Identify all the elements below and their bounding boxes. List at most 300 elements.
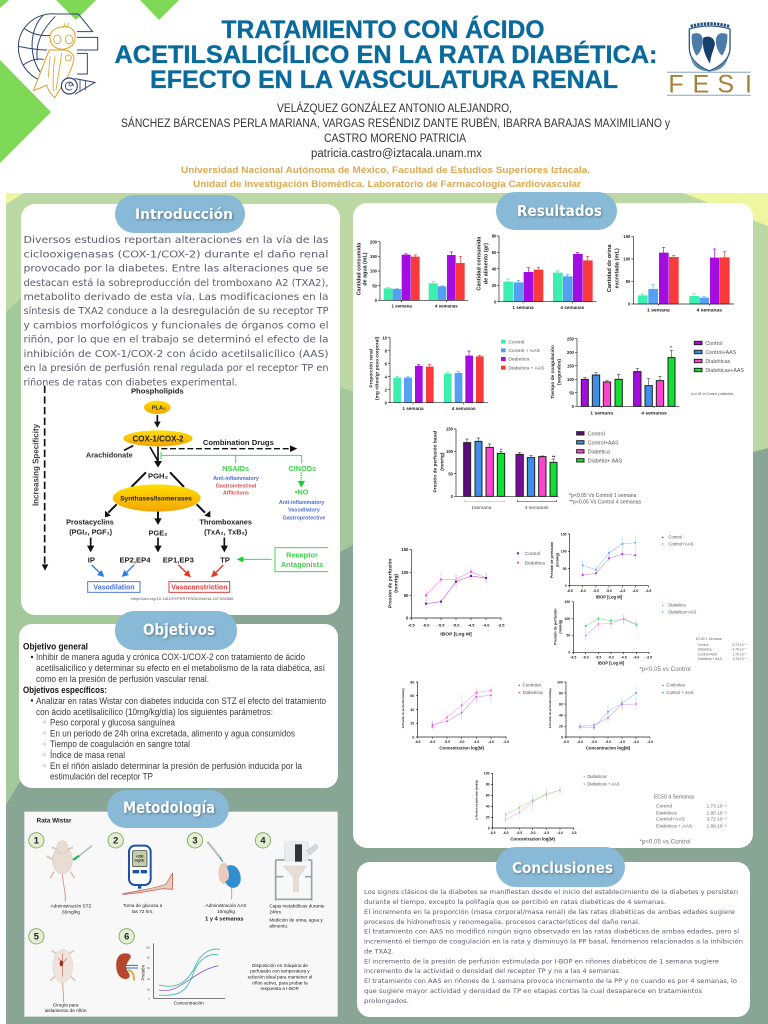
chart: COX pathway diagram: CINODs: [288, 464, 316, 473]
line chart: controles vs control+AAS: 40: [559, 714, 563, 718]
bar chart: proporción renal: 10: [382, 335, 388, 340]
table: EC50 1 semana: 5.70·10⁻⁶: [732, 643, 747, 647]
bar chart: agua: 4 semanas: [435, 303, 458, 308]
text block: objetivos: Peso corporal y glucosa sanguínea: [50, 718, 175, 728]
authors: patricia.castro@iztacala.unam.mx: [311, 148, 482, 160]
line chart: diabética vs diabética+AAS IBOP: -4.5: [621, 656, 627, 660]
line chart: control vs diabética IBOP: -5.5: [438, 622, 445, 627]
panel: Introducción: [21, 195, 340, 615]
step 1: STZ: Administración STZ: [51, 904, 91, 909]
bar chart: agua: 50: [372, 283, 378, 288]
text block: objetivos: como en la presión de perfusión vascular renal.: [36, 674, 209, 684]
bar chart: orina: 50: [626, 279, 631, 284]
line chart: controles vs diabéticas: -6.0: [429, 740, 435, 744]
line chart: controles vs diabéticas: Diabeticas: [523, 690, 543, 695]
step 6: perfusion: riñón activo, para probar la: [252, 980, 308, 985]
line chart: control vs diabética IBOP: -4.5: [468, 622, 475, 627]
bar chart: coagulación: 250: [567, 336, 575, 341]
bar chart: presión basal: Presión de perfusión basal: [433, 431, 439, 493]
line chart: controles vs diabéticas: [401, 680, 543, 750]
bar chart: coagulación: 0: [572, 404, 575, 409]
step 2: glucose: las 72 hrs.: [132, 909, 153, 914]
line chart: control vs diabética IBOP: Control: [525, 551, 540, 557]
text block: objetivos: con ácido acetilsalicílico (10mg/kg/día) los siguientes parámetros:: [36, 707, 273, 717]
chart: COX pathway diagram: Gastrointestinal: [216, 483, 257, 489]
note: significance 4 semanas: *p<0.05 vs Control: [639, 839, 691, 845]
bar chart: alimento: 20: [492, 283, 497, 288]
bar chart: proporción renal: 1 semana: [402, 406, 424, 411]
step 6: perfusion: solución ideal para mantener el: [248, 975, 312, 980]
bar chart: agua: 0: [375, 298, 378, 303]
bar chart: presión basal: [433, 427, 558, 511]
line chart: control vs diabética IBOP: 100: [401, 570, 409, 575]
panel: Metodología: Rata Wistar: [37, 818, 72, 825]
step 2: glucose: <200: [136, 854, 144, 858]
title: [114, 15, 658, 94]
chart: COX pathway diagram: Antagonists: [281, 560, 323, 569]
chart: COX pathway diagram: Vasodilatory: [288, 507, 320, 513]
legend: coagulación: Diabéticas: [705, 359, 731, 365]
line chart: diabética vs diabética+AAS IBOP: (mmHg): [559, 619, 563, 634]
text block: objetivos: Tiempo de coagulación en sangre total: [50, 739, 190, 749]
line chart: control vs control+AAS IBOP: (mmHg): [555, 552, 559, 567]
legend: presión basal: Control: [588, 431, 605, 437]
table: EC50 4 semanas: Control+AAS: [656, 817, 686, 823]
bar chart: alimento: [477, 234, 597, 310]
heading: Objetivos: [115, 611, 237, 650]
table: EC50 1 semana: Control: [698, 643, 709, 647]
text block: objetivos: En un periodo de 24h orina excretada, alimento y agua consumidos: [50, 728, 296, 738]
line chart: controles vs control+AAS: -6.5: [563, 740, 569, 744]
bar chart: proporción renal: 2: [385, 387, 388, 392]
bar chart: presión basal: **: [552, 454, 556, 459]
bar chart: orina: 4 semanas: [697, 308, 722, 314]
step 3: AAS: Administración AAS: [206, 903, 246, 908]
step 6: perfusion: perfusado con temperatura y: [250, 969, 310, 974]
step 5: surgery: [29, 929, 87, 1013]
text block: conclusiones: durante el tiempo, excepto la polifagia que se percibió en ratas diabéticas de 4 semanas.: [364, 898, 666, 906]
bar chart: coagulación: [550, 336, 679, 417]
heading: Introducción: [115, 195, 245, 233]
bar chart: presión basal: *: [500, 447, 502, 452]
line chart: controles vs control+AAS: Controles: [666, 683, 685, 688]
line chart: diabéticas vs diabéticas+AAS: 40: [486, 805, 490, 809]
step 4: cage: 4: [260, 836, 266, 846]
line chart: diabética vs diabética+AAS IBOP: Diabética: [668, 603, 686, 608]
text block: introducción: y cambios morfológicos y funcionales de órganos como el: [24, 320, 328, 332]
legend: coagulación: Control: [705, 341, 723, 347]
line chart: controles vs diabéticas: 0: [412, 735, 414, 739]
chart: COX pathway diagram: Vasodilation: [93, 584, 135, 591]
line chart: control vs diabética IBOP: [387, 547, 545, 637]
chart: COX pathway diagram: [31, 386, 328, 601]
bar chart: orina: 150: [623, 234, 631, 239]
panel: Objetivos: [19, 611, 338, 788]
line chart: diabéticas vs diabéticas+AAS: 100: [484, 772, 490, 776]
table: EC50 1 semana: 1.76·10⁻⁵: [732, 657, 747, 661]
line chart: diabética vs diabética+AAS IBOP: Presión de perfusión: [553, 608, 557, 645]
table: EC50 1 semana: EC50 1 Semana: [696, 637, 722, 641]
affiliations: Universidad Nacional Autónoma de México, Facultad de Estudios Superiores Iztacala.: [181, 165, 590, 176]
bar chart: agua: Cantidad consumida: [356, 243, 362, 295]
step 4: cage: Cajas metabólicas durante: [269, 903, 325, 908]
bar chart: coagulación: 150: [567, 363, 575, 368]
chart: COX pathway diagram: NSAIDs: [222, 464, 249, 473]
line chart: controles vs control+AAS: -4.5: [619, 740, 625, 744]
title: ACETILSALICÍLICO EN LA RATA DIABÉTICA:: [114, 40, 658, 69]
step 6: perfusion: Concentración: [174, 1000, 204, 1005]
line chart: control vs diabética IBOP: IBOP [Log M]: [440, 631, 472, 637]
line chart: control vs control+AAS IBOP: -6.0: [580, 589, 586, 593]
chart: COX pathway diagram: Anti-inflammatory: [279, 500, 324, 506]
panel: Metodología: [24, 790, 338, 1017]
text block: objetivos: [23, 642, 326, 782]
text block: objetivos: Objetivo general: [23, 642, 88, 652]
legend: coagulación: *p<0.05 Vs Control y diabetica: [690, 392, 733, 396]
text block: objetivos: acetilsalicílico y determinar su efecto en el metabolismo de la rata diabética, así: [36, 663, 326, 673]
text block: objetivos: En el riñón aislado determinar la presión de perfusión inducida por la: [50, 761, 302, 771]
bar chart: orina: excretada (mL): [615, 248, 621, 288]
line chart: controles vs control+AAS: -5.5: [591, 740, 597, 744]
step 6: perfusion: 40: [147, 977, 151, 981]
chart: COX pathway diagram: Afflictions: [223, 491, 249, 497]
chart: COX pathway diagram: (TxA₂, TxB₂): [204, 527, 248, 536]
table: EC50 4 semanas: 1.86·10⁻⁵: [707, 823, 727, 828]
bar charts: [356, 234, 744, 511]
chart: COX pathway diagram: Combination Drugs: [203, 438, 274, 447]
text block: introducción: síntesis de TXA2 conduce a la desregulación de su receptor TP: [24, 306, 329, 317]
line chart: controles vs diabéticas: 40: [410, 708, 414, 712]
step 5: surgery: Cirugía para: [53, 1002, 79, 1007]
line chart: diabéticas vs diabéticas+AAS: -5.5: [516, 831, 522, 835]
line chart: diabética vs diabética+AAS IBOP: 0: [568, 651, 570, 655]
legend: proporción renal: Control + AAS: [508, 348, 540, 354]
legend: proporción renal: Diabetica: [508, 357, 529, 363]
authors: SÁNCHEZ BÁRCENAS PERLA MARIANA, VARGAS RESÉNDIZ DANTE RUBÉN, IBARRA BARAJAS MAXIMILIANO y: [121, 117, 670, 130]
line chart: diabética vs diabética+AAS IBOP: 150: [564, 600, 570, 604]
line chart: control vs control+AAS IBOP: -5.5: [593, 589, 599, 593]
line chart: controles vs diabéticas: Concentracion log(M): [439, 745, 484, 750]
text block: introducción: Diversos estudios reportan alteraciones en la vía de las: [24, 235, 329, 246]
legend: presión basal: [569, 431, 642, 506]
bar chart: proporción renal: Proporción renal: [368, 349, 374, 388]
chart: COX pathway diagram: EP1,EP3: [163, 556, 194, 565]
step 6: perfusion: respuesta a I-BOP.: [260, 986, 299, 991]
line chart: controles vs control+AAS: -6.0: [577, 740, 583, 744]
legend: proporción renal: [501, 339, 545, 371]
heading: Metodología: Metodología: [123, 798, 215, 817]
line chart: control vs control+AAS IBOP: 50: [563, 567, 567, 571]
heading: Conclusiones: [496, 847, 625, 887]
bar chart: agua: de agua (mL): [363, 252, 369, 286]
line chart: diabéticas vs diabéticas+AAS: 0: [488, 826, 490, 830]
line chart: control vs control+AAS IBOP: -4.5: [619, 589, 625, 593]
bar chart: coagulación: 4 semanas: [641, 411, 667, 417]
bar chart: orina: 1 semana: [647, 308, 670, 314]
step 4: cage: 24hrs: [269, 909, 282, 914]
line chart: controles vs diabéticas: -4.0: [488, 740, 494, 744]
line chart: controles vs diabéticas: 60: [410, 694, 414, 698]
step 2: glucose: 2: [113, 836, 118, 846]
legend: presión basal: Control+AAS: [588, 440, 619, 446]
text block: objetivos: Inhibir de manera aguda y crónica COX-1/COX-2 con tratamiento de ácido: [36, 652, 305, 662]
title: EFECTO EN LA VASCULATURA RENAL: [150, 66, 618, 94]
line chart: diabéticas vs diabéticas+AAS: -4.0: [557, 831, 563, 835]
bar chart: agua: 200: [370, 239, 378, 244]
text block: conclusiones: procesos de hidronefrosis y renomegalia, procesos característicos del daño renal.: [364, 918, 640, 926]
table: EC50 4 semanas: EC50 4 Semanas: [654, 795, 695, 801]
heading: Resultados: [496, 192, 617, 230]
line chart: diabética vs diabética+AAS IBOP: -6.0: [583, 656, 589, 660]
step 2: glucose: [108, 833, 173, 914]
text block: conclusiones: incremento de la actividad o densidad del receptor TP y no a las 4 semanas.: [364, 968, 621, 975]
chart: COX pathway diagram: EP2,EP4: [119, 556, 151, 565]
bar chart: presión basal: 1semana: [471, 505, 492, 511]
line chart: controles vs diabéticas: -4.5: [473, 740, 479, 744]
bar chart: alimento: 60: [492, 250, 497, 255]
line chart: control vs diabética IBOP: 50: [404, 593, 409, 598]
step 4: cage: Medición de orina, agua y: [269, 918, 323, 923]
step 1: STZ: 1: [34, 836, 39, 846]
text block: introducción: [24, 235, 329, 388]
bar chart: orina: 100: [623, 257, 631, 262]
table: EC50 1 semana: Diabetica: [698, 648, 712, 652]
line chart: diabética vs diabética+AAS IBOP: IBOP [Log M]: [598, 661, 625, 666]
line chart: control vs control+AAS IBOP: -3.5: [645, 589, 651, 593]
chart: COX pathway diagram: COX-1/COX-2: [132, 434, 184, 443]
line chart: control vs diabética IBOP: -6.5: [408, 622, 416, 627]
heading: Introducción: Introducción: [135, 207, 233, 223]
line chart: controles vs control+AAS: 100: [557, 680, 563, 684]
icon: UNAM shield: [689, 24, 730, 71]
table: EC50 1 semana: 1.76·10⁻⁵: [732, 652, 747, 656]
step 6: perfusion: 80: [147, 955, 151, 959]
line chart: control vs control+AAS IBOP: 100: [561, 550, 567, 554]
chart: COX pathway diagram: (PGI₂, PGF₁): [69, 527, 113, 536]
line chart: controles vs control+AAS: -5.0: [605, 740, 611, 744]
chart: COX pathway diagram: Synthases/Isomerases: [120, 495, 192, 502]
text block: conclusiones: [364, 888, 743, 1005]
line chart: diabética vs diabética+AAS IBOP: 50: [566, 634, 570, 638]
line chart: control vs control+AAS IBOP: Presión de perfusión: [550, 542, 554, 578]
bar chart: coagulación: 50: [569, 390, 575, 395]
step 3: AAS: 1 y 4 semanas: [205, 916, 244, 922]
line chart: controles vs control+AAS: -3.5: [647, 740, 653, 744]
text block: introducción: riñón, por lo que en el trabajo se determinó el efecto de la: [24, 335, 328, 346]
line chart: diabéticas vs diabéticas+AAS: [474, 772, 620, 841]
bar chart: agua: 150: [370, 254, 378, 259]
bar chart: presión basal: 0: [451, 494, 454, 499]
line chart: diabética vs diabética+AAS IBOP: -6.5: [570, 656, 576, 660]
line chart: diabética vs diabética+AAS IBOP: -3.5: [646, 656, 652, 660]
step 1: STZ: 65mg/kg: [62, 910, 80, 915]
note: significance: *p<0.05 vs Control: [639, 667, 691, 673]
line chart: control vs diabética IBOP: -5.0: [453, 622, 460, 627]
text block: conclusiones: El incremento de la presión de perfusión estimulada por I-BOP en riñones diabéticos de 1 semana sugiere: [364, 957, 719, 965]
text block: introducción: ciclooxigenasas (COX-1/COX-2) durante el daño renal: [24, 249, 328, 260]
line chart: control vs diabética IBOP: -4.0: [483, 622, 490, 627]
step 3: AAS: [187, 833, 246, 922]
line chart: controles vs diabéticas: -5.5: [444, 740, 450, 744]
line chart: control vs control+AAS IBOP: -4.0: [632, 589, 638, 593]
bar chart: alimento: 40: [492, 266, 497, 271]
bar chart: presión basal: (mmHg): [439, 452, 445, 471]
step 6: perfusion: [116, 929, 312, 1005]
chart: COX pathway diagram: Vasoconstriction: [171, 584, 227, 591]
text block: objetivos: Objetivos específicos:: [23, 685, 107, 695]
line chart: controles vs control+AAS: 80: [559, 691, 563, 695]
step 5: surgery: aislamiento de riñón: [45, 1008, 87, 1013]
bar chart: agua: [356, 239, 468, 308]
panel: Conclusiones: [357, 847, 750, 1017]
line chart: control vs control+AAS IBOP: Control: [668, 535, 682, 540]
line chart: controles vs control+AAS: Concentracion log(M): [586, 745, 631, 750]
text block: introducción: destacan está la sobreproducción del tromboxano A2 (TXA2),: [24, 278, 329, 289]
text block: conclusiones: incrementó el tiempo de coagulación en la rata y disminuyó la PP basal, fenómenos relacionados a la inhibición: [364, 938, 743, 946]
line chart: control vs diabética IBOP: 150: [401, 547, 409, 552]
line chart: controles vs diabéticas: 80: [410, 680, 414, 684]
bar chart: agua: 1 semana: [391, 303, 412, 308]
table: EC50 1 semana: Control+AAS: [698, 652, 718, 656]
line chart: diabética vs diabética+AAS IBOP: [553, 600, 697, 666]
line chart: diabética vs diabética+AAS IBOP: -5.5: [595, 656, 601, 660]
legend: presión basal: Diabétia+ AAS: [588, 458, 623, 464]
step 6: perfusion: Presión: [141, 964, 146, 981]
table: EC50 1 semana: 4.76·10⁻⁶: [732, 648, 747, 652]
bar chart: alimento: 0: [494, 299, 497, 304]
text block: conclusiones: que sugiere mayor actividad y densidad de TP en etapas cortas la cual desaparece en tratamientos: [364, 988, 702, 995]
bar chart: orina: 0: [628, 302, 631, 307]
bar chart: alimento: de alimento (gr): [484, 243, 490, 284]
chart: COX pathway diagram: PLA₂: [152, 405, 166, 411]
bar chart: coagulación: 100: [567, 377, 575, 382]
authors: VELÁZQUEZ GONZÁLEZ ANTONIO ALEJANDRO,: [277, 102, 512, 115]
heading: Conclusiones: Conclusiones: [512, 859, 613, 877]
line chart: controles vs diabéticas: 20: [410, 722, 414, 726]
table: EC50 4 semanas: 1.73·10⁻⁵: [707, 804, 727, 809]
table: EC50 4 semanas: Control: [656, 804, 672, 810]
step 1: STZ: [29, 833, 92, 915]
table: EC50 4 semanas: Diabética + AAS: [656, 823, 693, 829]
heading: Metodología: [107, 790, 229, 828]
text block: introducción: en la presión de perfusión renal regulada por el receptor TP en: [24, 363, 329, 374]
step 6: perfusion: 60: [147, 966, 151, 970]
chart: COX pathway diagram: •NO: [295, 487, 309, 496]
bar chart: proporción renal: 0: [385, 400, 388, 405]
authors: CASTRO MORENO PATRICIA: [324, 133, 466, 145]
bar chart: coagulación: 1 semana: [590, 411, 613, 417]
text block: objetivos: Índice de masa renal: [50, 750, 125, 760]
table: EC50 4 semanas: 1.95·10⁻⁵: [707, 810, 727, 815]
bar chart: orina: Cantidad de orina: [607, 244, 613, 292]
legend: coagulación: [690, 341, 744, 396]
table: EC50 1 semana: Diabética + AAS: [698, 657, 723, 661]
line chart: diabéticas vs diabéticas+AAS: Diabeticas + AAS: [587, 781, 620, 786]
text block: introducción: inhibición de COX-1/COX-2 con ácido acetilsalicílico (AAS): [24, 349, 328, 360]
line chart: control vs control+AAS IBOP: -5.0: [606, 589, 612, 593]
text block: conclusiones: de TXA2.: [364, 948, 394, 955]
line chart: control vs control+AAS IBOP: Control+AAS: [668, 541, 694, 546]
step 6: perfusion: 6: [124, 932, 129, 942]
step 6: perfusion: 20: [147, 988, 151, 992]
logo: FES Iztacala: [18, 14, 98, 98]
bar chart: proporción renal: (mg riñon/gr peso corporal): [375, 336, 381, 400]
step 5: surgery: 5: [34, 932, 39, 942]
step 4: cage: [255, 833, 325, 928]
bar chart: coagulación: Tiempo de coagulación: [550, 345, 556, 399]
text block: introducción: riñones de ratas con diabetes experimental.: [24, 378, 238, 388]
line chart: diabéticas vs diabéticas+AAS: -6.0: [503, 831, 509, 835]
text block: objetivos: Analizar en ratas Wistar con diabetes inducida con STZ el efecto del tratamiento: [36, 696, 326, 706]
text block: objetivos: estimulación del receptor TP: [50, 772, 153, 782]
logo: UNAM FESI: FESI: [668, 70, 752, 98]
table: EC50 4 semanas: Diabética: [656, 810, 677, 816]
line chart: controles vs diabéticas: Controles: [523, 683, 541, 688]
line chart: controles vs control+AAS: [548, 680, 694, 750]
bar chart: proporción renal: [368, 335, 488, 411]
text block: conclusiones: prolongados.: [364, 998, 409, 1005]
bar chart: proporción renal: 6: [385, 361, 388, 366]
step 6: perfusion: 100: [146, 946, 151, 950]
bar chart: presión basal: 100: [446, 449, 454, 454]
bar chart: coagulación: (segundos): [557, 359, 563, 385]
legend: proporción renal: Diabetica + AAS: [508, 365, 545, 371]
logo: UNAM FESI: [667, 24, 752, 98]
bar chart: proporción renal: 8: [385, 348, 388, 353]
line chart: controles vs control+AAS: 60: [559, 702, 563, 706]
table: EC50 4 semanas: [654, 795, 727, 829]
line chart: control vs control+AAS IBOP: -6.5: [567, 589, 573, 593]
chart: COX pathway diagram: IP: [88, 556, 95, 565]
line chart: controles vs control+AAS: Δ Presión de perfusión (mmHg): [548, 688, 552, 728]
chart: COX pathway diagram: PGH₂: [148, 471, 168, 480]
bar chart: presión basal: 50: [448, 471, 454, 476]
panel: Resultados: [353, 192, 753, 848]
legend: presión basal: **p<0.05 Vs Control 4 semanas: [569, 500, 642, 506]
line chart: control vs control+AAS IBOP: [550, 532, 694, 600]
line chart: control vs diabética IBOP: 0: [406, 616, 409, 621]
line chart: controles vs diabéticas: Δ Presión de perfusión (mmHg): [401, 688, 405, 728]
step 2: glucose: mg/dL: [135, 858, 145, 862]
line chart: control vs diabética IBOP: -6.0: [423, 622, 430, 627]
title: TRATAMIENTO CON ÁCIDO: [222, 15, 544, 44]
bar chart: alimento: 4 semanas: [560, 305, 585, 310]
bar chart: alimento: 80: [492, 234, 497, 239]
line chart: diabéticas vs diabéticas+AAS: -6.5: [490, 831, 496, 835]
line chart: diabéticas vs diabéticas+AAS: Δ Presión de perfusión (mmHg): [474, 780, 478, 820]
table: EC50 1 semana: [696, 637, 747, 661]
text block: conclusiones: Los signos clásicos de la diabetes se manifiestan desde el inicio del establecimiento de la diabetes y persisten: [364, 888, 738, 896]
bar chart: presión basal: 150: [446, 427, 454, 432]
table: EC50 4 semanas: 3.72·10⁻⁵: [707, 817, 727, 822]
line chart: controles vs diabéticas: -3.5: [503, 740, 509, 744]
chart: COX pathway diagram: Phospholipids: [131, 387, 184, 396]
line chart: control vs diabética IBOP: Diabética: [525, 560, 545, 566]
legend: coagulación: Diabéticas+AAS: [705, 368, 744, 374]
chart: COX pathway diagram: PGE₂: [149, 528, 167, 537]
text block: conclusiones: El tratamiento con AAS en riñones de 1 semana provoca incremento de la PP y no cuando es por 4 semanas, lo: [364, 978, 737, 985]
bar chart: alimento: Cantidad consumida: [477, 236, 483, 291]
line chart: diabética vs diabética+AAS IBOP: 100: [564, 617, 570, 621]
legend: coagulación: Control+AAS: [705, 350, 737, 356]
chart: COX pathway diagram: Thromboxanes: [199, 517, 252, 526]
line chart: diabéticas vs diabéticas+AAS: -3.5: [571, 831, 577, 835]
step 6: perfusion: Disposición en máquina de: [252, 963, 308, 968]
text block: conclusiones: El tratamiento con AAS no modificó ningún signo observado en las ratas diabéticas de ambas edades, pero sí: [364, 928, 739, 936]
line charts: [387, 532, 747, 845]
chart: COX pathway diagram: Anti-inflammatory: [213, 476, 259, 482]
text block: conclusiones: El incremento en la proporción (masa corporal/masa renal) de las ratas diabéticas de ambas edades sugiere: [364, 908, 735, 916]
